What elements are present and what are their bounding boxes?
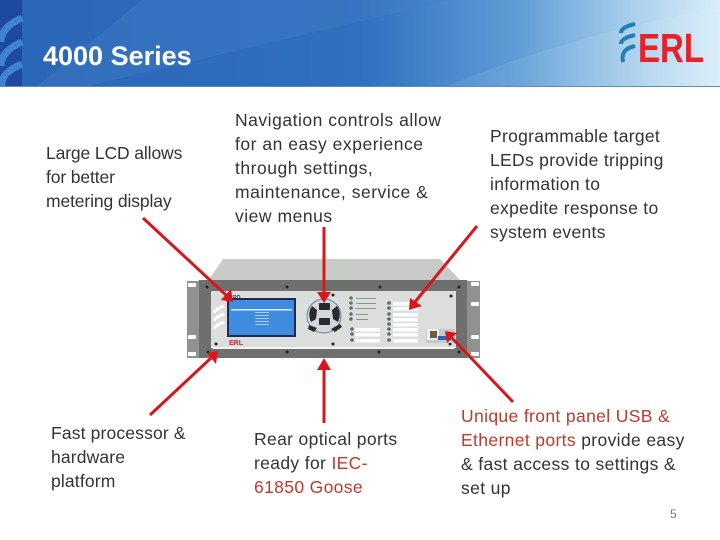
panel logo: ERL xyxy=(229,340,244,347)
text: USB and Ethernet: Ethernet ports provide easy xyxy=(461,430,685,450)
front ports xyxy=(426,329,455,343)
text: programmable LEDs: Programmable target xyxy=(490,126,660,146)
text: processor: platform xyxy=(51,471,115,491)
arrow: rear optical xyxy=(317,358,331,423)
text: rear optical ports: 61850 Goose xyxy=(254,477,363,497)
text: USB and Ethernet xyxy=(461,406,685,498)
arrow: LCD xyxy=(143,218,233,302)
text: processor xyxy=(51,423,186,491)
text: LCD: metering display xyxy=(46,191,172,211)
text: navigation controls: through settings, xyxy=(235,158,373,178)
text: navigation controls: for an easy experience xyxy=(235,134,424,154)
text: processor: hardware xyxy=(51,447,125,467)
text: LCD: for better xyxy=(46,167,115,187)
LED labels xyxy=(355,302,418,342)
text: navigation controls: maintenance, service & xyxy=(235,182,428,202)
text: rear optical ports: Rear optical ports xyxy=(254,429,397,449)
text: USB and Ethernet: Unique front panel USB & xyxy=(461,406,670,426)
text: rear optical ports xyxy=(254,429,397,497)
navigation keypad xyxy=(307,299,341,333)
arrow: processor xyxy=(150,351,218,415)
text: USB and Ethernet: set up xyxy=(461,478,511,498)
text: programmable LEDs: system events xyxy=(490,222,606,242)
front panel swirl xyxy=(214,306,224,329)
indicator LEDs xyxy=(349,296,391,342)
text: LCD xyxy=(46,143,182,211)
LCD screen xyxy=(227,298,296,337)
text: navigation controls xyxy=(235,110,442,226)
arrow: navigation xyxy=(317,227,331,303)
text: USB and Ethernet: & fast access to settings & xyxy=(461,454,676,474)
text: LCD: Large LCD allows xyxy=(46,143,182,163)
text: processor: Fast processor & xyxy=(51,423,186,443)
header banner xyxy=(0,0,720,87)
device illustration: RO xyxy=(233,295,241,301)
arrow: target LEDs xyxy=(409,226,477,310)
title: 4000 Series xyxy=(43,41,192,71)
text: rear optical ports: ready for IEC- xyxy=(254,453,368,473)
text: programmable LEDs: LEDs provide tripping xyxy=(490,150,664,170)
text: navigation controls: view menus xyxy=(235,206,333,226)
page number: 5 xyxy=(670,507,677,521)
text: programmable LEDs xyxy=(490,126,664,242)
arrow: USB ports xyxy=(445,331,513,402)
text: programmable LEDs: information to xyxy=(490,174,600,194)
text: navigation controls: Navigation controls allow xyxy=(235,110,442,130)
text: programmable LEDs: expedite response to xyxy=(490,198,658,218)
